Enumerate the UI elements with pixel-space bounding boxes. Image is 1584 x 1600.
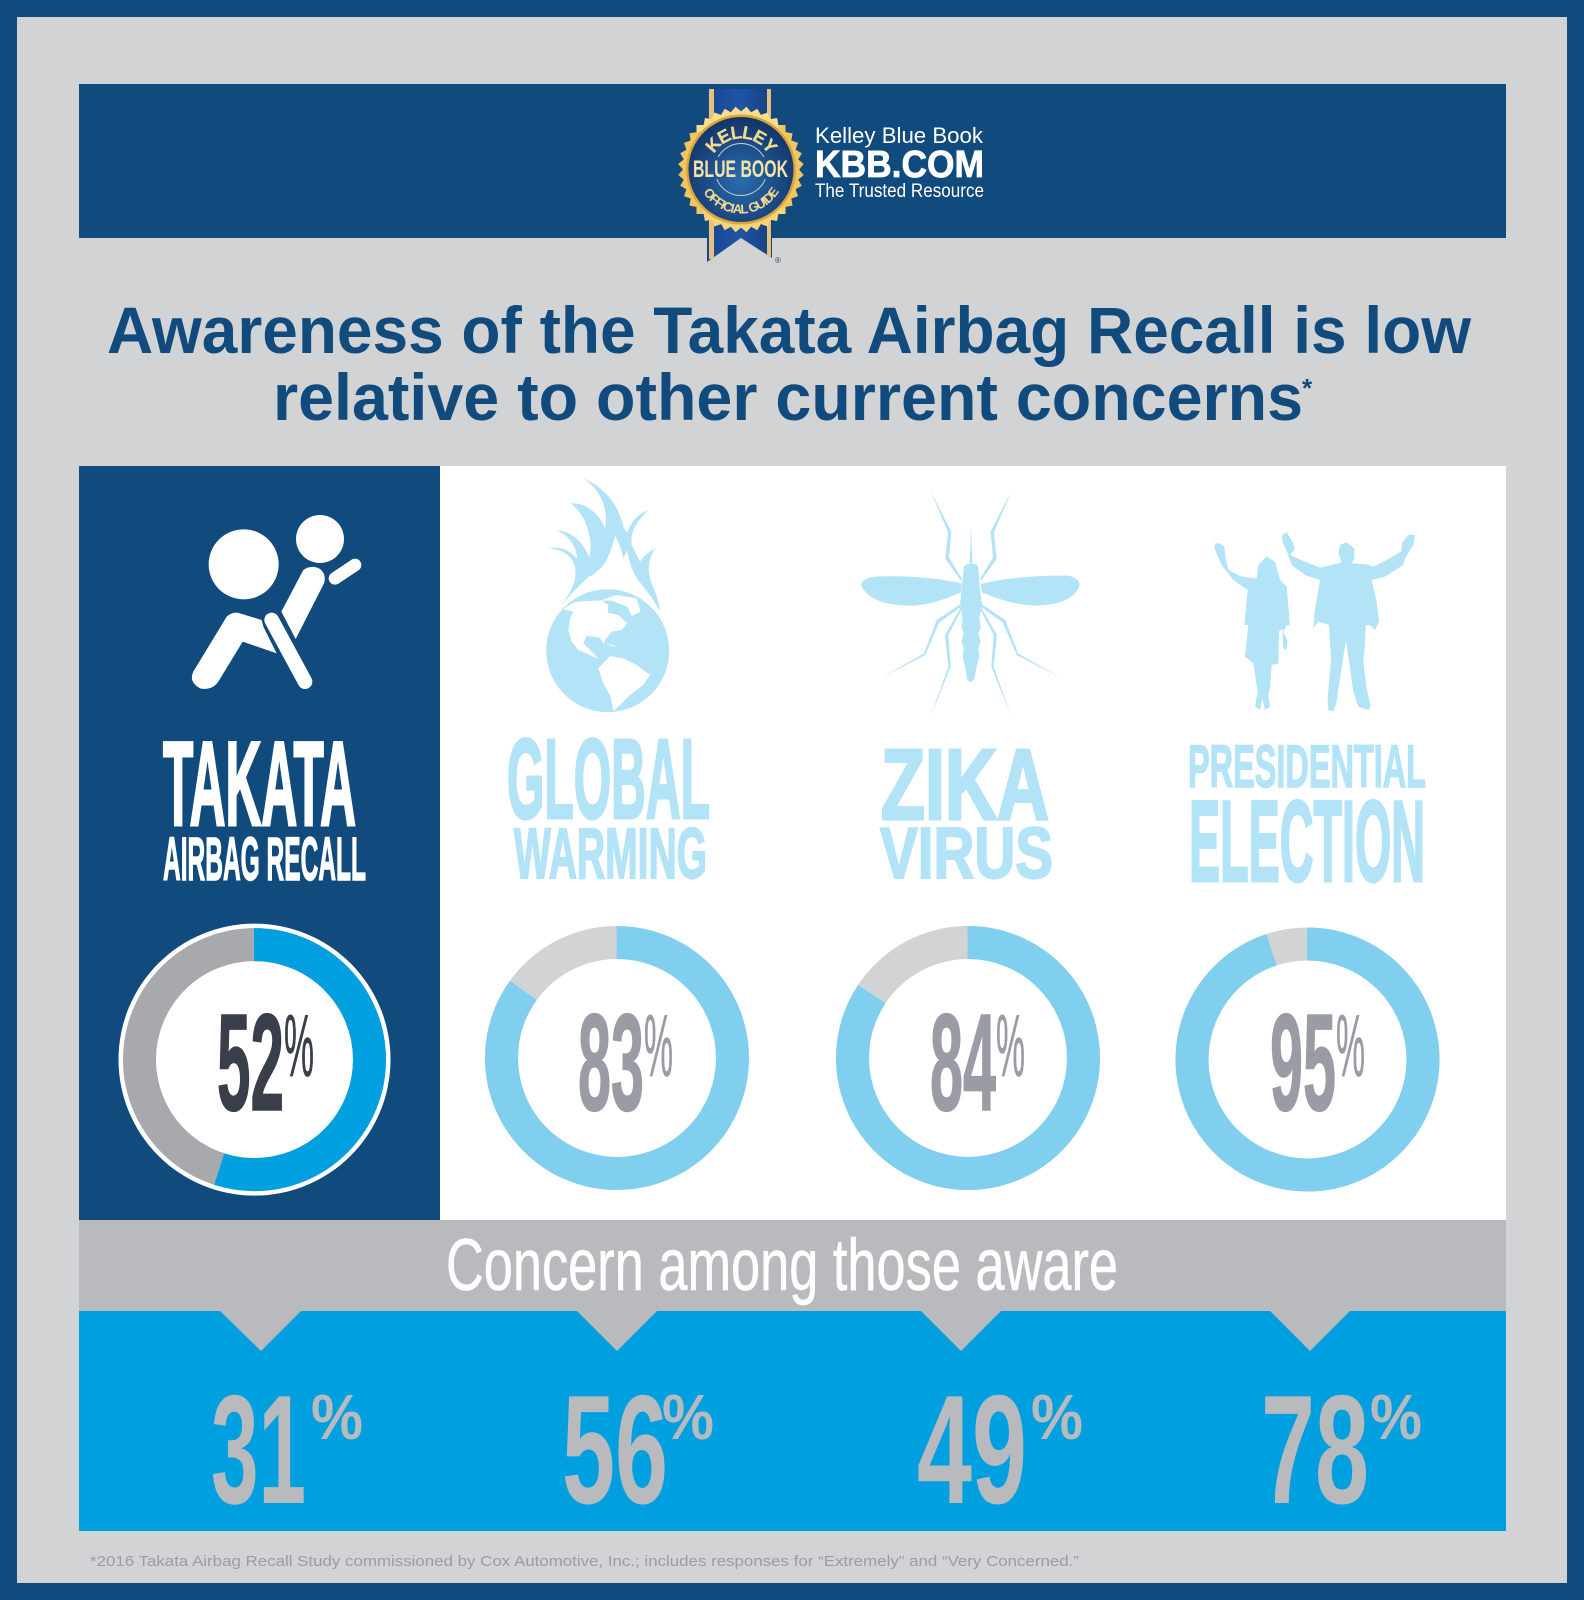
footnote: *2016 Takata Airbag Recall Study commissioned by Cox Automotive, Inc.; includes responses for “Extremely” and “Very Concerned.” xyxy=(90,1553,1079,1570)
donut: 95% xyxy=(1192,944,1423,1175)
donut: 83%: % xyxy=(644,996,673,1095)
icon: burning globe xyxy=(546,478,669,712)
panel: Global warming xyxy=(502,478,732,1174)
arrow: Election xyxy=(1270,1311,1350,1351)
stat: 56%: % xyxy=(662,1381,714,1453)
donut: 84%: 84 xyxy=(930,986,996,1140)
donut: 83%: 83 xyxy=(578,986,644,1140)
donut: 83% xyxy=(502,942,732,1174)
donut: 52%: 52 xyxy=(217,986,284,1140)
logo text: KBB.COM: KBB.COM xyxy=(815,144,984,186)
donut: 95%: % xyxy=(1336,996,1365,1095)
icon: two candidates waving xyxy=(1214,532,1415,712)
panel: Takata airbag recall: AIRBAG RECALL xyxy=(163,825,366,893)
label: Warming: WARMING xyxy=(514,815,707,894)
stat: 56%: 56 xyxy=(562,1363,668,1536)
stat: 78%: 78 xyxy=(1261,1363,1369,1536)
donut: 84% xyxy=(852,942,1084,1174)
panel: Takata airbag recall: TAKATA xyxy=(163,717,356,851)
panel: awareness background xyxy=(440,466,1506,1220)
icon: Kelley Blue Book seal xyxy=(678,89,804,265)
donut: 52%: % xyxy=(284,996,314,1095)
logo text: tagline: The Trusted Resource xyxy=(815,181,984,202)
icon: Kelley Blue Book seal: KELLEY xyxy=(704,126,778,153)
title: Awareness of the Takata Airbag Recall is low xyxy=(107,293,1472,367)
stat: 78%: % xyxy=(1370,1381,1422,1453)
stat: 31%: 31 xyxy=(211,1363,306,1536)
arrow: Zika xyxy=(921,1311,1001,1351)
icon: mosquito xyxy=(861,491,1080,717)
icon: Kelley Blue Book seal: OFFICIAL GUIDE xyxy=(704,186,780,214)
title xyxy=(107,293,1472,434)
stat: 49%: 49 xyxy=(917,1363,1027,1536)
stat: 49%: % xyxy=(1031,1381,1083,1453)
icon: Kelley Blue Book seal: BLUE BOOK xyxy=(693,156,788,183)
band: concern among those aware xyxy=(79,1220,1506,1312)
label: Zika: ZIKA xyxy=(881,729,1049,841)
donut: 95%: 95 xyxy=(1270,986,1336,1140)
arrow: Takata xyxy=(220,1311,301,1351)
logo text: Kelley Blue Book: Kelley Blue Book xyxy=(815,123,984,148)
panel: Presidential election xyxy=(1188,532,1426,1175)
title: * xyxy=(1302,373,1313,403)
text: GLOBAL xyxy=(507,716,710,842)
stat: 31%: % xyxy=(311,1381,363,1453)
panel: concern percentages xyxy=(79,1311,1506,1536)
icon: airbag warning figure xyxy=(192,515,355,689)
donut: 52% xyxy=(118,924,390,1196)
header banner xyxy=(79,84,1506,265)
panel: Takata airbag recall xyxy=(79,466,440,1220)
band: concern among those aware: Concern among those aware xyxy=(446,1225,1118,1306)
icon: Kelley Blue Book seal: ® xyxy=(775,256,781,265)
title: relative to other current concerns xyxy=(273,360,1303,434)
panel: Zika virus xyxy=(852,491,1084,1174)
label: Virus: VIRUS xyxy=(880,814,1053,894)
donut: 84%: % xyxy=(996,996,1025,1095)
arrow: Global warming xyxy=(577,1311,657,1351)
